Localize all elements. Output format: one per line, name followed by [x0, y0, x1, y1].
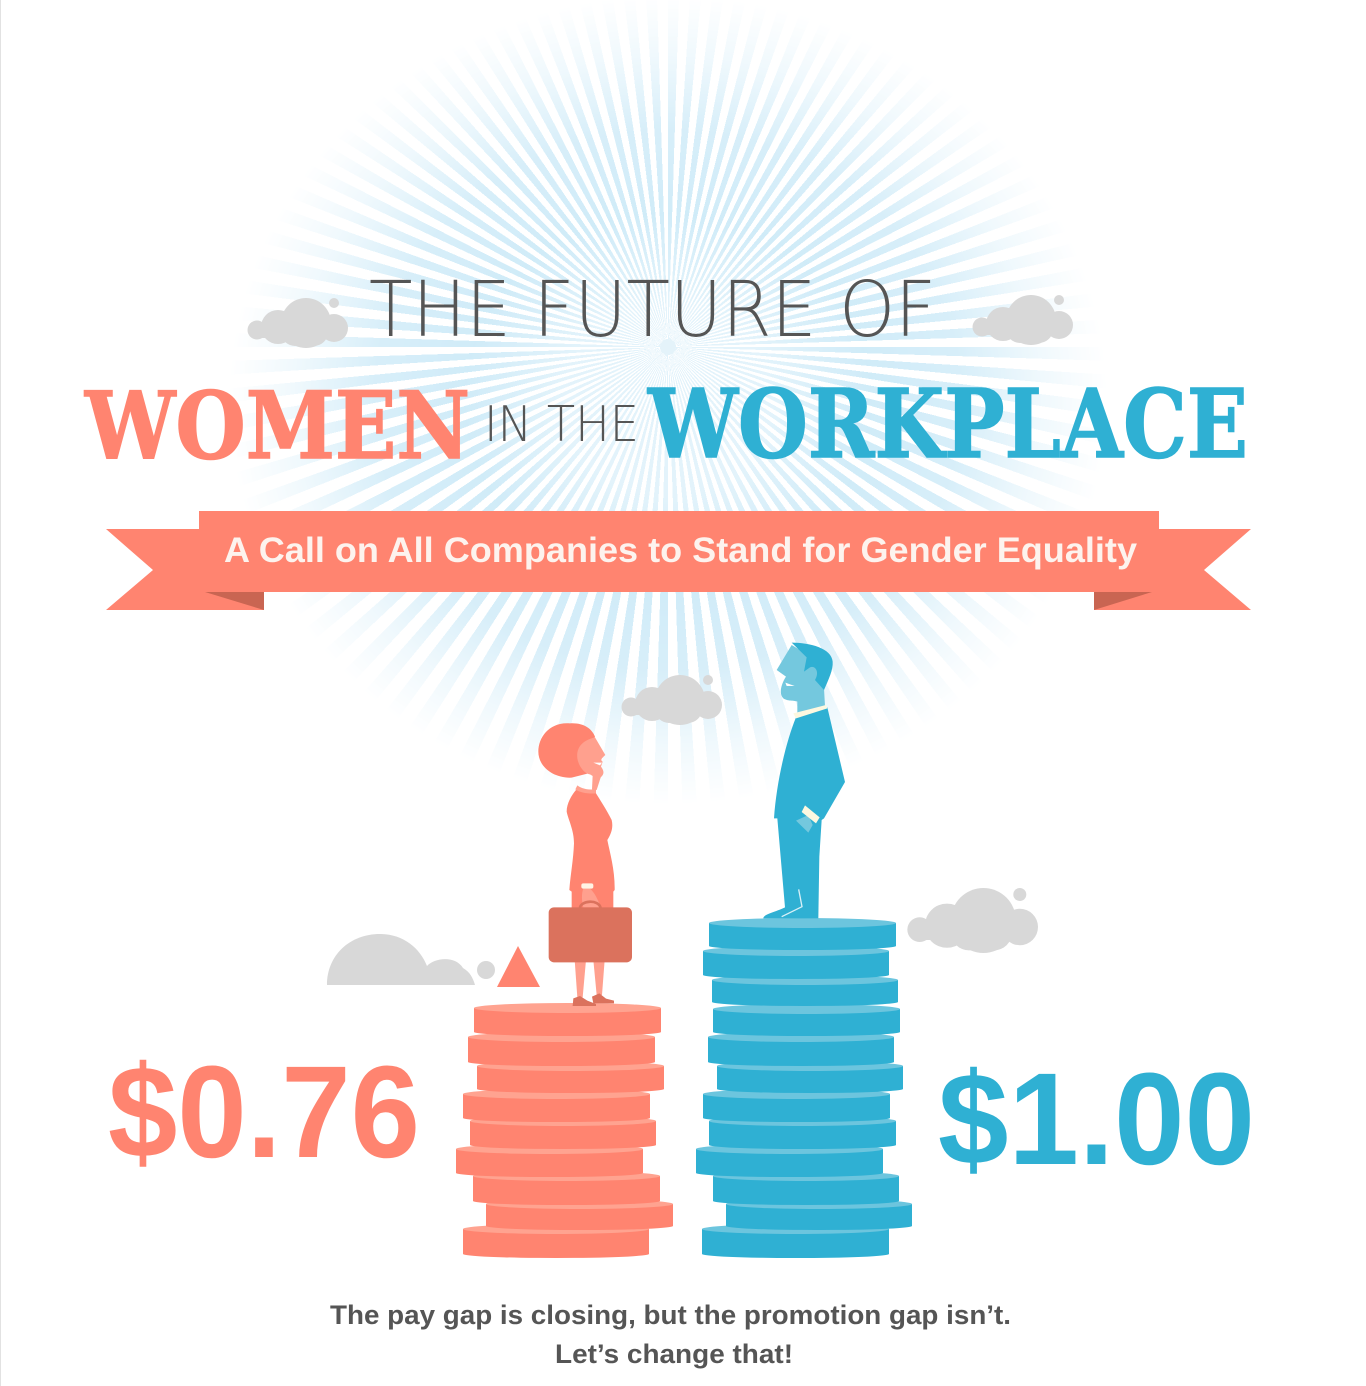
blue coin stack: [696, 918, 912, 1258]
title word: workplace: WORKPLACE: [647, 369, 1248, 480]
title word: women: WOMEN: [84, 371, 470, 480]
woman figure: [538, 723, 632, 1006]
man face and neck: [777, 645, 825, 713]
sunburst background: [265, 29, 1072, 771]
collar: [575, 785, 596, 793]
banner left fold: [205, 592, 264, 610]
title: [84, 266, 1248, 480]
banner left tail: [106, 529, 264, 610]
closing line one: The pay gap is closing, but the promotion gap isn’t.: [330, 1300, 1011, 1330]
dress: [567, 790, 615, 908]
trouser crease: [782, 889, 802, 917]
banner right fold: [1094, 592, 1152, 610]
man hair: [792, 643, 833, 690]
man pay figure: $1.00: [938, 1045, 1255, 1192]
closing line two: Let’s change that!: [555, 1339, 793, 1369]
banner: [106, 511, 1251, 610]
neck: [592, 775, 601, 790]
hand: [582, 889, 601, 907]
sandals: [573, 993, 614, 1006]
center glow dot: [660, 339, 676, 355]
title words: in the: IN THE: [484, 396, 639, 453]
legs: [575, 960, 586, 997]
closing statement: [330, 1300, 1011, 1369]
smile: [593, 763, 602, 765]
coral coin stack: [456, 1003, 673, 1258]
cloud: upper right: [972, 295, 1073, 345]
man cuff: [802, 805, 820, 823]
man suit: [763, 707, 845, 918]
briefcase: [549, 907, 632, 962]
triangle: [497, 946, 540, 987]
cloud: center: [622, 675, 722, 725]
face: [577, 737, 605, 777]
hair: [538, 723, 595, 778]
banner right tail: [1094, 529, 1251, 610]
briefcase handle: [580, 902, 601, 908]
banner text: A Call on All Companies to Stand for Gender Equality: [224, 531, 1138, 570]
title line: the future of: THE FUTURE OF: [369, 266, 936, 355]
banner body: [199, 511, 1159, 592]
man smile: [785, 683, 795, 686]
man collar: [793, 705, 827, 718]
bracelet: [581, 883, 593, 889]
cloud: right of blue stack: [907, 888, 1038, 953]
cloud: upper left: [248, 298, 348, 348]
woman pay figure: $0.76: [108, 1038, 420, 1185]
man figure: [763, 643, 845, 918]
man hand: [796, 815, 813, 833]
cloud: lower left: [327, 934, 495, 985]
